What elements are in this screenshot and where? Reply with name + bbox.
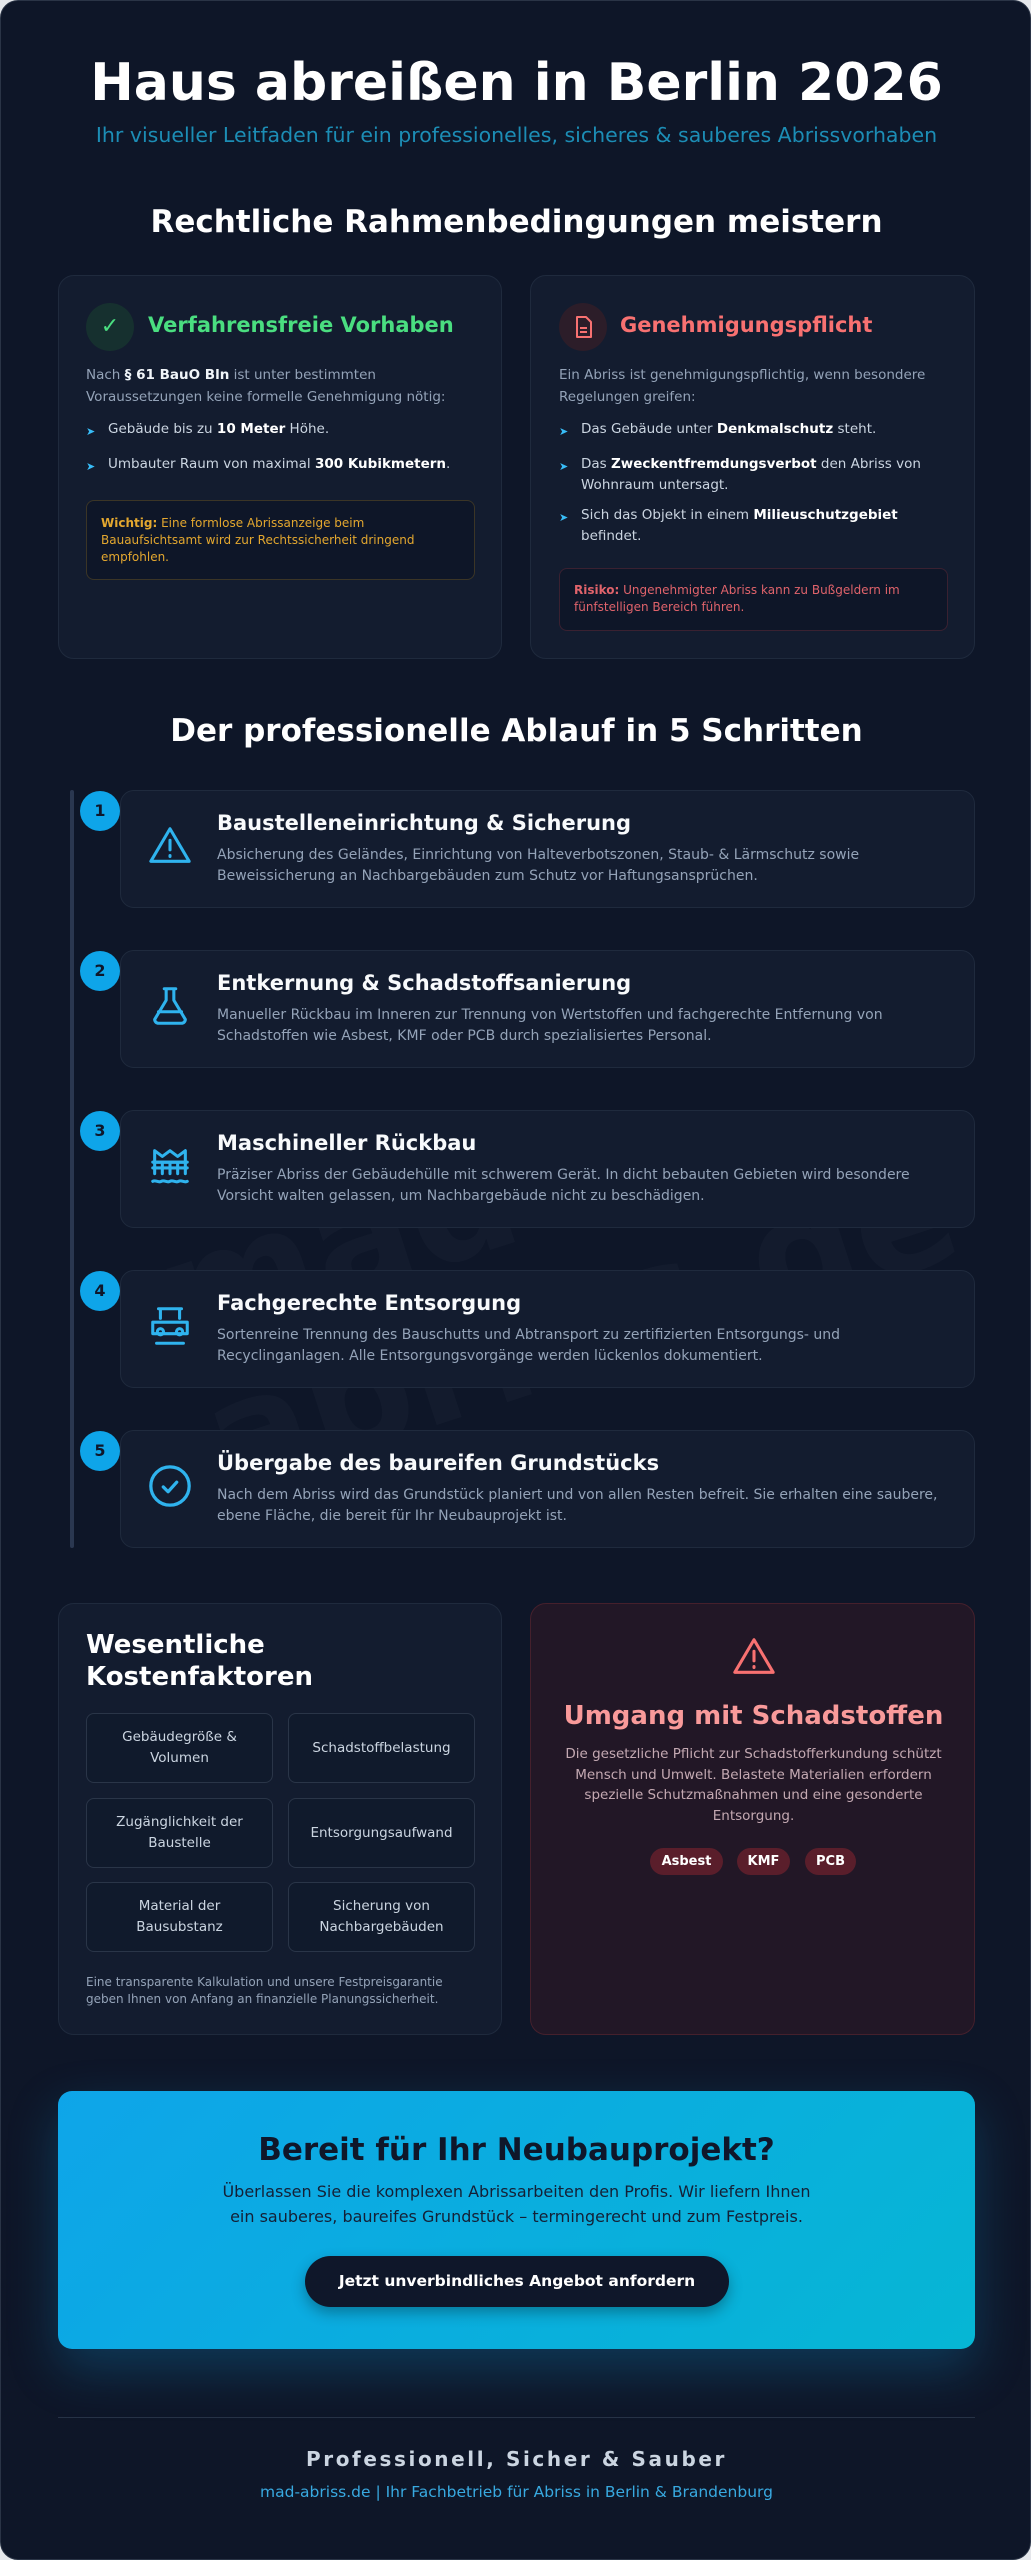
panel: verfahrensfreie Vorhaben [58,275,502,659]
step 4 [120,1270,975,1388]
icon: demolition [151,1149,189,1184]
panel: Genehmigungspflicht: ➤ [559,425,568,438]
factor grid: Gebäudegröße & [122,1729,237,1745]
number 3 [80,1111,120,1151]
icon: warning [733,1638,775,1674]
icon: check circle [149,1465,191,1507]
footer link: mad-abriss.de | Ihr Fachbetrieb für Abriss in Berlin & Brandenburg [260,2483,773,2501]
number 1: 1 [94,801,106,820]
icon: document [559,303,607,351]
bullet 2: Das Zweckentfremdungsverbot den Abriss von Wohnraum untersagt. [581,456,921,493]
step 5: Nach dem Abriss wird das Grundstück planiert und von allen Resten befreit. Sie erhalten eine saubere, ebene Fläche, die bereit für Ihr Neubauprojekt ist. [217,1487,937,1524]
text: Nach § 61 BauO Bln ist unter bestimmten Voraussetzungen keine formelle Genehmigung nötig: [86,367,445,405]
heading: Genehmigungspflicht [620,313,872,337]
step 2: Manueller Rückbau im Inneren zur Trennung von Wertstoffen und fachgerechte Entfernung von Schadstoffen wie Asbest, KMF oder PCB durch spezialisiertes Personal. [217,1007,883,1044]
text: Die gesetzliche Pflicht zur Schadstofferkundung schützt Mensch und Umwelt. Belastete Materialien erfordern spezielle Schutzmaßnahmen und eine gesonderte Entsorgung. [565,1746,942,1824]
step 4: Fachgerechte Entsorgung [217,1291,521,1315]
bullet 2: Umbauter Raum von maximal 300 Kubikmetern. [108,456,450,472]
CTA text: ein sauberes, baureifes Grundstück – termingerecht und zum Festpreis. [230,2207,803,2226]
footnote: Eine transparente Kalkulation und unsere Festpreisgarantie geben Ihnen von Anfang an finanzielle Planungssicherheit. [86,1975,443,2006]
icon: truck [151,1307,189,1345]
number 2 [80,951,120,991]
step 4: Sortenreine Trennung des Bauschutts und Abtransport zu zertifizierten Entsorgungs- und Recyclinganlagen. Alle Entsorgungsvorgänge werden lückenlos dokumentiert. [217,1327,840,1364]
panel: Genehmigungspflicht: ➤ [559,460,568,473]
factor grid: Nachbargebäuden [319,1919,444,1935]
number 4: 4 [94,1281,106,1300]
tags [650,1848,856,1875]
factor grid [86,1713,475,1952]
number 2: 2 [94,961,106,980]
callout: risiko [559,568,948,631]
factor grid: Baustelle [148,1835,211,1851]
step 2 [120,950,975,1068]
panel: verfahrensfreie Vorhaben: ➤ [86,460,95,473]
tags: PCB [816,1854,845,1869]
footer tagline: Professionell, Sicher & Sauber [306,2447,727,2471]
icon: flask [153,987,187,1025]
step 3: Präziser Abriss der Gebäudehülle mit schwerem Gerät. In dicht bebauten Gebieten wird besondere Vorsicht walten gelassen, um Nachbargebäude nicht zu beschädigen. [217,1167,910,1204]
step 3 [120,1110,975,1228]
step 5 [120,1430,975,1548]
watermark: abriss.de [184,1122,978,1528]
subtitle: Ihr visueller Leitfaden für ein professionelles, sicheres & sauberes Abrissvorhaben [96,123,937,147]
number 5 [80,1431,120,1471]
bullet 1: Gebäude bis zu 10 Meter Höhe. [108,421,329,437]
divider [58,2417,975,2418]
button: Jetzt unverbindliches Angebot anfordern [339,2272,695,2290]
timeline line [70,790,74,1548]
step 1: Absicherung des Geländes, Einrichtung von Halteverbotszonen, Staub- & Lärmschutz sowie Beweissicherung an Nachbargebäuden zum Schutz vor Haftungsansprüchen. [217,847,859,884]
watermark: mad [137,1107,538,1385]
factor grid: Bausubstanz [136,1919,223,1935]
bullet 1: Das Gebäude unter Denkmalschutz steht. [581,421,876,437]
heading: Wesentliche [86,1630,265,1660]
callout: wichtig: Wichtig: Eine formlose Abrissanzeige beim Bauaufsichtsamt wird zur Rechtssicherheit dringend empfohlen. [101,516,414,564]
CTA text [222,2182,811,2226]
tags: Asbest [662,1854,711,1869]
number 4 [80,1271,120,1311]
tags: KMF [748,1854,779,1869]
step 5: Übergabe des baureifen Grundstücks [217,1451,659,1475]
panel: verfahrensfreie Vorhaben: ➤ [86,425,95,438]
factor grid: Entsorgungsaufwand [310,1824,453,1840]
step 2: Entkernung & Schadstoffsanierung [217,971,631,995]
step 1 [120,790,975,908]
icon: check [86,303,134,351]
icon: warning [149,827,191,863]
panel: Kostenfaktoren [58,1603,502,2035]
CTA heading: Bereit für Ihr Neubauprojekt? [258,2132,775,2168]
title: Haus abreißen in Berlin 2026 [90,53,943,113]
bullet 3: Sich das Objekt in einem Milieuschutzgebiet befindet. [581,507,898,544]
heading: Kostenfaktoren [86,1662,313,1692]
number 3: 3 [94,1121,106,1140]
panel: Schadstoffe [530,1603,975,2035]
factor grid: Sicherung von [333,1898,430,1914]
CTA panel [58,2091,975,2349]
icon: check: ✓ [101,314,119,339]
heading: process: Der professionelle Ablauf in 5 Schritten [170,713,863,749]
button [305,2256,729,2307]
factor grid: Zugänglichkeit der [116,1814,243,1830]
number 5: 5 [94,1441,106,1460]
CTA text: Überlassen Sie die komplexen Abrissarbeiten den Profis. Wir liefern Ihnen [222,2182,811,2201]
step 1: Baustelleneinrichtung & Sicherung [217,811,631,835]
text: Ein Abriss ist genehmigungspflichtig, wenn besondere Regelungen greifen: [559,367,925,405]
heading: Umgang mit Schadstoffen [564,1701,943,1731]
step 3: Maschineller Rückbau [217,1131,476,1155]
panel: Genehmigungspflicht [530,275,975,659]
factor grid: Volumen [150,1750,209,1766]
heading [86,1630,313,1692]
callout: risiko: Risiko: Ungenehmigter Abriss kann zu Bußgeldern im fünfstelligen Bereich führen. [574,583,900,614]
heading: legal: Rechtliche Rahmenbedingungen meistern [150,204,883,240]
callout: wichtig [86,500,475,580]
watermark [141,984,995,1516]
factor grid: Schadstoffbelastung [312,1740,451,1756]
factor grid: Material der [139,1898,220,1914]
panel: Genehmigungspflicht: ➤ [559,511,568,524]
heading: Verfahrensfreie Vorhaben [148,313,454,337]
number 1 [80,791,120,831]
